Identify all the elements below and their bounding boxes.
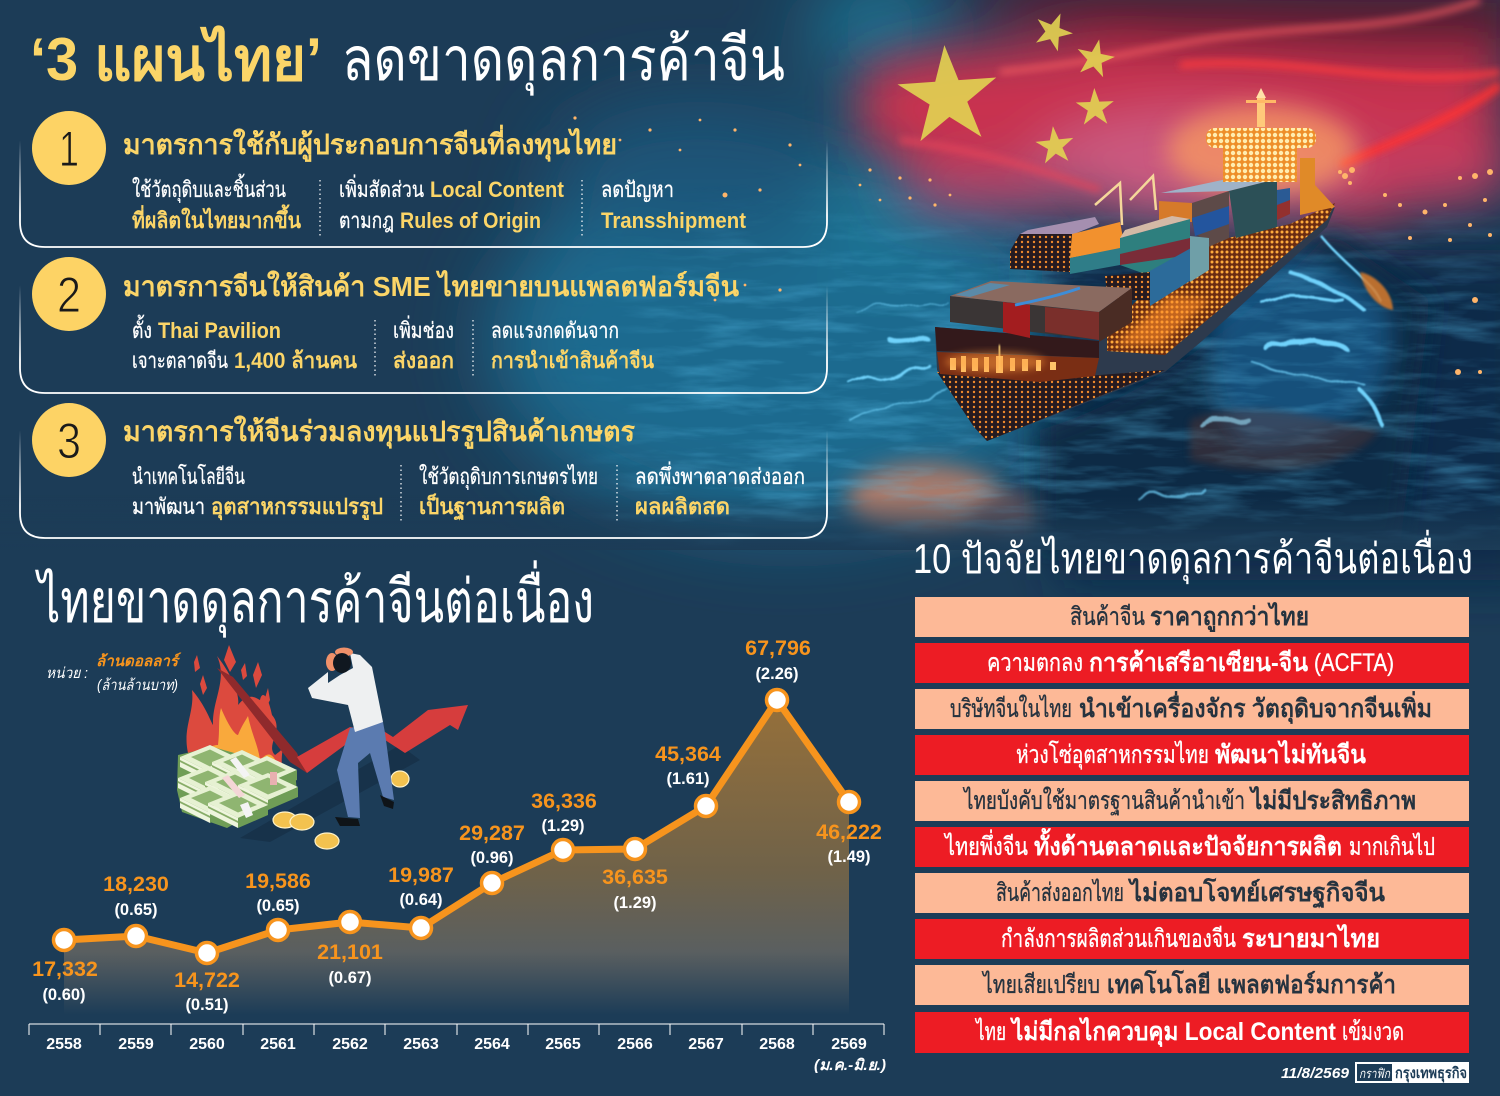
number badge 2	[32, 257, 106, 331]
column 1-3: Transshipment	[601, 208, 747, 233]
factor 1	[915, 597, 1469, 637]
USD values: 14,722	[174, 968, 240, 992]
number badge 1	[32, 111, 106, 185]
title: ‘3 แผนไทย’	[30, 24, 322, 93]
dark right sea	[1040, 250, 1500, 580]
x axis: 2561	[260, 1036, 296, 1053]
mid containers	[1010, 234, 1074, 272]
heading 2: มาตรการจีนให้สินค้า SME ไทยขายบนแพลตฟอร์มจีน	[123, 270, 739, 302]
x axis: 2567	[688, 1036, 724, 1053]
illustration: burning money, falling arrow and stressed man	[177, 645, 468, 849]
column 2-3: การนำเข้าสินค้าจีน	[491, 348, 654, 373]
unit legend: ล้านดอลลาร์	[96, 652, 182, 670]
column 1-1: ใช้วัตถุดิบและชิ้นส่วน	[132, 174, 286, 203]
baht values: (0.60)	[42, 986, 86, 1004]
factor 8: กำลังการผลิตส่วนเกินของจีน	[1001, 925, 1236, 953]
USD values: 36,635	[602, 865, 668, 889]
trousers	[337, 722, 394, 818]
wave streaks	[850, 235, 1385, 500]
column 1-2	[339, 174, 565, 233]
factor 9: ไทยเสียเปรียบ	[981, 970, 1100, 999]
back containers	[1161, 179, 1277, 193]
column 3-1: อุตสาหกรรมแปรรูป	[211, 494, 383, 521]
column 1-2: Rules of Origin	[400, 208, 541, 233]
x axis: 2568	[759, 1036, 795, 1053]
panel: measure 2	[20, 257, 827, 393]
factor 2: ความตกลง	[987, 649, 1083, 677]
dark wake under ship	[1040, 232, 1430, 545]
USD values: 21,101	[317, 940, 383, 964]
USD values: 45,364	[655, 742, 721, 766]
number badge 2: 2	[57, 267, 81, 323]
column 2-1: ตั้ง	[132, 315, 152, 343]
factor 8	[915, 919, 1469, 959]
stars	[895, 6, 1118, 164]
factor 7	[915, 873, 1469, 913]
column 3-3: ผลผลิตสด	[635, 494, 730, 519]
baht values: (1.29)	[613, 894, 657, 912]
factor 7: สินค้าส่งออกไทย	[996, 878, 1124, 907]
sea glow	[490, 0, 1090, 530]
column 3-2: เป็นฐานการผลิต	[419, 492, 565, 521]
man	[308, 648, 394, 826]
hair	[333, 653, 351, 673]
x axis: 2562	[332, 1036, 368, 1053]
factor 4: ห่วงโซ่อุตสาหกรรมไทย	[1016, 740, 1209, 770]
column 1-2: Local Content	[430, 177, 565, 202]
baht values: (0.64)	[399, 891, 443, 909]
factor 9: เทคโนโลยี แพลตฟอร์มการค้า	[1107, 969, 1396, 999]
column 1-1: ที่ผลิตในไทยมากขึ้น	[132, 204, 301, 233]
flames	[187, 645, 283, 770]
factor 10: เข้มงวด	[1342, 1018, 1404, 1046]
USD values	[32, 636, 882, 992]
area under line	[64, 700, 849, 1015]
panel frame 2	[20, 285, 827, 393]
number badge 3	[32, 403, 106, 477]
column 2-2: ส่งออก	[393, 348, 454, 373]
data points	[54, 690, 860, 964]
baht values: (2.26)	[755, 665, 799, 683]
factor 10	[915, 1012, 1469, 1053]
credit logo	[1355, 1062, 1469, 1083]
USD values: 18,230	[103, 872, 169, 896]
column 2-2	[393, 315, 454, 373]
column 2-1: 1,400 ล้านคน	[234, 348, 357, 373]
credit logo: กรุงเทพธุรกิจ	[1395, 1064, 1467, 1083]
baht values: (0.67)	[328, 969, 372, 987]
column 1-2: เพิ่มสัดส่วน	[339, 174, 424, 202]
front containers	[950, 296, 1099, 340]
x axis: 2564	[474, 1036, 510, 1053]
title	[30, 24, 785, 96]
factor 3: บริษัทจีนในไทย	[950, 694, 1072, 723]
panel: measure 3	[20, 403, 827, 538]
factor 10: ไม่มีกลไกควบคุม Local Content	[1009, 1016, 1337, 1048]
money pile	[177, 745, 298, 828]
column 3-1	[132, 464, 383, 521]
factor 5: ไม่มีประสิทธิภาพ	[1248, 785, 1416, 815]
chart heading: ไทยขาดดุลการค้าจีนต่อเนื่อง	[35, 560, 594, 638]
factor 6	[915, 827, 1469, 867]
column 1-3: ลดปัญหา	[601, 177, 674, 202]
factor 7: ไม่ตอบโจทย์เศรษฐกิจจีน	[1127, 877, 1385, 909]
title: ลดขาดดุลการค้าจีน	[342, 26, 785, 96]
deck lights	[1107, 203, 1335, 355]
factor 9	[915, 965, 1469, 1005]
superstructure	[1223, 146, 1297, 182]
fade to navy at bottom	[0, 495, 1500, 550]
column 3-3	[635, 461, 805, 519]
x axis: 2569	[831, 1036, 867, 1053]
column 3-1: นำเทคโนโลยีจีน	[132, 464, 245, 489]
USD values: 19,586	[245, 869, 311, 893]
credit logo: กราฟิก	[1359, 1066, 1391, 1081]
column 3-3: ลดพึ่งพาตลาดส่งออก	[635, 461, 805, 489]
factor 5: ไทยบังคับใช้มาตรฐานสินค้านำเข้า	[962, 786, 1245, 815]
factor 3: นำเข้าเครื่องจักร วัตถุดิบจากจีนเพิ่ม	[1079, 691, 1432, 725]
USD values: 46,222	[816, 820, 882, 844]
bokeh specks	[573, 116, 1493, 375]
rising arrow	[297, 705, 468, 773]
x axis: 2563	[403, 1036, 439, 1053]
x axis: 2566	[617, 1036, 653, 1053]
factor 3	[915, 689, 1469, 729]
x axis: 2560	[189, 1036, 225, 1053]
factor 2: (ACFTA)	[1314, 649, 1394, 677]
column 2-1	[132, 315, 357, 373]
unit legend: หน่วย :	[46, 665, 88, 682]
panel frame 1	[20, 140, 827, 247]
hull	[935, 207, 1335, 441]
column 2-1: Thai Pavilion	[158, 318, 281, 343]
x axis: 2565	[545, 1036, 581, 1053]
factor 6: ไทยพึ่งจีน	[943, 829, 1028, 861]
unit legend	[46, 652, 182, 694]
column 2-2: เพิ่มช่อง	[393, 315, 454, 343]
shirt	[308, 653, 383, 732]
baht values: (1.29)	[541, 817, 585, 835]
panel frame 3	[20, 430, 827, 538]
number badge 1: 1	[59, 121, 79, 177]
column 2-3: ลดแรงกดดันจาก	[491, 318, 619, 343]
USD values: 29,287	[459, 821, 525, 845]
reflected orange	[1360, 272, 1393, 310]
foam glow	[847, 464, 1003, 536]
baht values: (0.65)	[114, 901, 158, 919]
photo: ocean, Chinese flag and container ship	[0, 0, 1500, 580]
column 3-2: ใช้วัตถุดิบการเกษตรไทย	[419, 464, 598, 490]
baht values: (0.51)	[185, 996, 229, 1014]
baht values	[42, 665, 871, 1014]
blue swell	[1211, 258, 1392, 450]
column 1-2: ตามกฎ	[339, 208, 394, 233]
date: 11/8/2569	[1281, 1065, 1350, 1082]
unit legend: (ล้านล้านบาท)	[97, 677, 178, 694]
heading 1: มาตรการใช้กับผู้ประกอบการจีนที่ลงทุนไทย	[123, 124, 617, 162]
factor 1: ราคาถูกกว่าไทย	[1150, 601, 1309, 633]
x axis: 2558	[46, 1036, 82, 1053]
factor 8: ระบายมาไทย	[1242, 923, 1380, 953]
cranes	[1095, 176, 1156, 225]
factor 1: สินค้าจีน	[1070, 603, 1145, 631]
USD values: 17,332	[32, 957, 98, 981]
ship	[935, 88, 1357, 441]
column 3-1: มาพัฒนา	[132, 494, 205, 519]
factor 2	[915, 643, 1469, 683]
number badge 3: 3	[57, 413, 81, 469]
baht values: (1.61)	[666, 770, 710, 788]
column 1-3	[601, 177, 747, 233]
factor 10: ไทย	[975, 1017, 1006, 1046]
heading 3: มาตรการให้จีนร่วมลงทุนแปรรูปสินค้าเกษตร	[123, 415, 635, 449]
USD values: 36,336	[531, 789, 597, 813]
shoes	[335, 817, 360, 826]
x axis	[29, 1024, 886, 1074]
coins	[273, 771, 409, 849]
panel: measure 1	[20, 111, 827, 247]
USD values: 19,987	[388, 863, 454, 887]
factor 6: ทั้งด้านตลาดและปัจจัยการผลิต	[1034, 827, 1342, 861]
column 1-1	[132, 174, 301, 233]
downward arrow stem	[217, 668, 307, 773]
panel: 10 factors list	[915, 597, 1469, 1053]
factor 4	[915, 735, 1469, 775]
factor 2: การค้าเสรีอาเซียน-จีน	[1089, 649, 1308, 677]
factor 6: มากเกินไป	[1349, 832, 1435, 861]
column 2-3	[491, 318, 654, 373]
factor 4: พัฒนาไม่ทันจีน	[1215, 739, 1366, 769]
factor 5	[915, 781, 1469, 821]
column 2-1: เจาะตลาดจีน	[132, 348, 228, 373]
bow spark	[999, 265, 1000, 370]
water texture	[616, 220, 1500, 540]
baht values: (1.49)	[827, 848, 871, 866]
baht values: (0.96)	[470, 849, 514, 867]
x axis: (ม.ค.-มิ.ย.)	[814, 1057, 886, 1074]
hands	[326, 653, 338, 671]
line chart: trade deficit	[29, 636, 886, 1074]
USD values: 67,796	[745, 636, 811, 660]
column 3-2	[419, 464, 598, 521]
x axis: 2559	[118, 1036, 154, 1053]
baht values: (0.65)	[256, 897, 300, 915]
line	[64, 700, 849, 953]
